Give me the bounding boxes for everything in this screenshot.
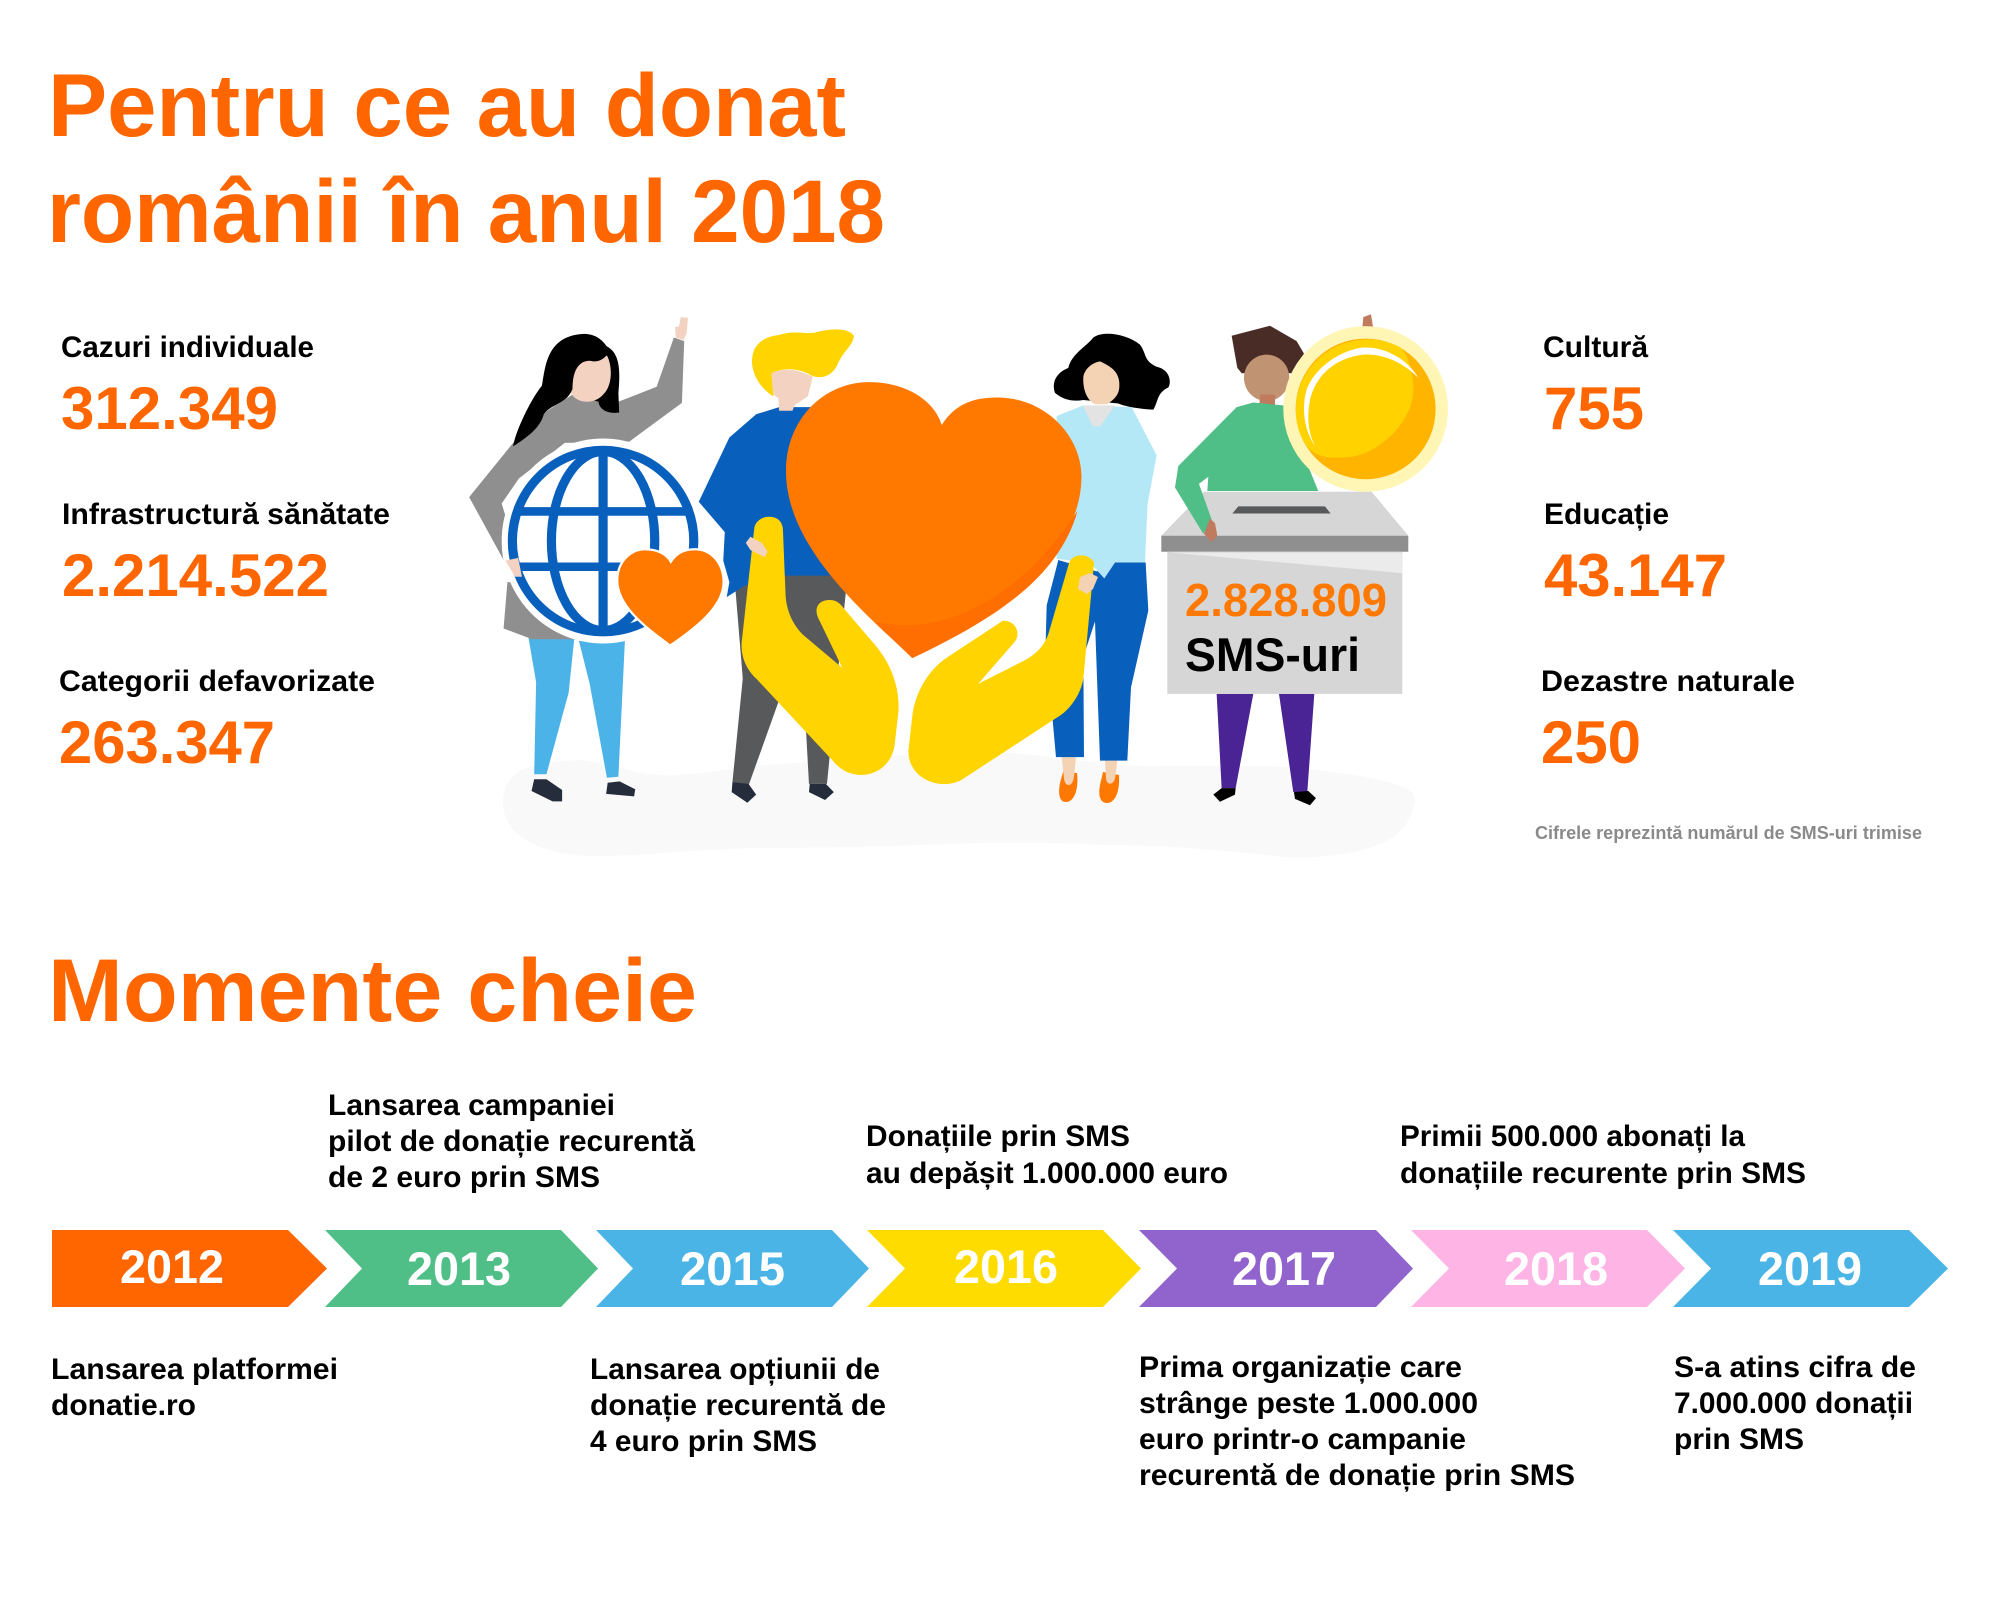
caption 2012: Lansarea platformei — [51, 1353, 338, 1386]
caption 2012: donatie.ro — [51, 1389, 196, 1422]
stats: right column: Dezastre naturale — [1541, 665, 1795, 698]
caption 2016 — [866, 1120, 1228, 1190]
caption 2015 — [590, 1353, 886, 1458]
ballot box — [1161, 492, 1408, 694]
stats: left column: Infrastructură sănătate — [62, 498, 390, 531]
milestone 2018: 2018 — [1504, 1242, 1608, 1295]
caption 2019: 7.000.000 donații — [1674, 1387, 1913, 1420]
caption 2013: de 2 euro prin SMS — [328, 1161, 600, 1194]
illustration: people giving — [469, 314, 1448, 857]
person with ballot box and coin — [1161, 314, 1448, 805]
caption 2017 — [1139, 1351, 1575, 1492]
milestone 2012: 2012 — [120, 1240, 224, 1293]
woman's hand — [1078, 573, 1098, 594]
caption 2017: strânge peste 1.000.000 — [1139, 1387, 1478, 1420]
caption 2018: Primii 500.000 abonați la — [1400, 1120, 1745, 1153]
title — [47, 55, 885, 261]
title: Pentru ce au donat — [48, 55, 846, 155]
stats: right column: Educație — [1544, 498, 1669, 531]
caption 2017: euro printr-o campanie — [1139, 1423, 1466, 1456]
ballot box text — [1185, 574, 1387, 681]
caption 2015: 4 euro prin SMS — [590, 1425, 817, 1458]
coin — [1283, 326, 1448, 492]
milestone 2019: 2019 — [1758, 1242, 1862, 1295]
heading: key moments: Momente cheie — [48, 940, 697, 1040]
stats: right column: 250 — [1541, 709, 1641, 776]
stats: right column: 43.147 — [1544, 542, 1727, 609]
caption 2017: Prima organizație care — [1139, 1351, 1462, 1384]
stats: left column: 263.347 — [59, 709, 275, 776]
caption 2016: Donațiile prin SMS — [866, 1120, 1130, 1153]
icon: small heart — [617, 549, 724, 646]
caption 2016: au depășit 1.000.000 euro — [866, 1157, 1228, 1190]
milestone 2018 — [1411, 1230, 1685, 1307]
caption 2013 — [328, 1089, 695, 1194]
caption 2018: donațiile recurente prin SMS — [1400, 1157, 1806, 1190]
milestone 2016: 2016 — [954, 1240, 1058, 1293]
man with blond hair — [699, 329, 854, 803]
caption 2017: recurentă de donație prin SMS — [1139, 1459, 1575, 1492]
icon: globe — [502, 439, 704, 644]
caption 2018 — [1400, 1120, 1806, 1190]
caption 2013: pilot de donație recurentă — [328, 1125, 695, 1158]
milestone 2017: 2017 — [1232, 1242, 1336, 1295]
caption 2019 — [1674, 1351, 1916, 1456]
stats: right column: Cultură — [1543, 331, 1648, 364]
caption 2015: donație recurentă de — [590, 1389, 886, 1422]
caption 2013: Lansarea campaniei — [328, 1089, 615, 1122]
icon: left hand — [742, 517, 899, 775]
icon: right hand — [908, 555, 1094, 784]
stats: left column: 312.349 — [61, 375, 278, 442]
milestone 2019 — [1673, 1230, 1948, 1307]
caption 2019: S-a atins cifra de — [1674, 1351, 1916, 1384]
title: românii în anul 2018 — [47, 161, 885, 261]
caption 2015: Lansarea opțiunii de — [590, 1353, 880, 1386]
icon: big heart held by hands — [742, 382, 1094, 784]
stats: right column — [1541, 331, 1795, 776]
milestone 2012 — [52, 1230, 327, 1307]
footnote: Cifrele reprezintă numărul de SMS-uri trimise — [1535, 823, 1922, 843]
stats: left column: Categorii defavorizate — [59, 665, 375, 698]
caption 2012 — [51, 1353, 338, 1422]
caption 2019: prin SMS — [1674, 1423, 1804, 1456]
ground shadow — [503, 752, 1415, 857]
stats: right column: 755 — [1544, 375, 1644, 442]
woman with globe — [469, 317, 724, 801]
ballot box text: SMS-uri — [1185, 628, 1360, 681]
milestone 2016 — [867, 1230, 1141, 1307]
stats: left column: 2.214.522 — [62, 542, 329, 609]
milestone 2017 — [1139, 1230, 1413, 1307]
ballot box text: 2.828.809 — [1185, 574, 1387, 626]
milestone 2013 — [325, 1230, 598, 1307]
timeline — [52, 1230, 1948, 1307]
stats: left column: Cazuri individuale — [61, 331, 314, 364]
woman's shoes — [1059, 772, 1119, 803]
milestone 2015: 2015 — [680, 1242, 785, 1295]
stats: left column — [59, 331, 390, 776]
woman with curly hair — [1046, 334, 1170, 785]
milestone 2013: 2013 — [407, 1242, 511, 1295]
milestone 2015 — [596, 1230, 869, 1307]
